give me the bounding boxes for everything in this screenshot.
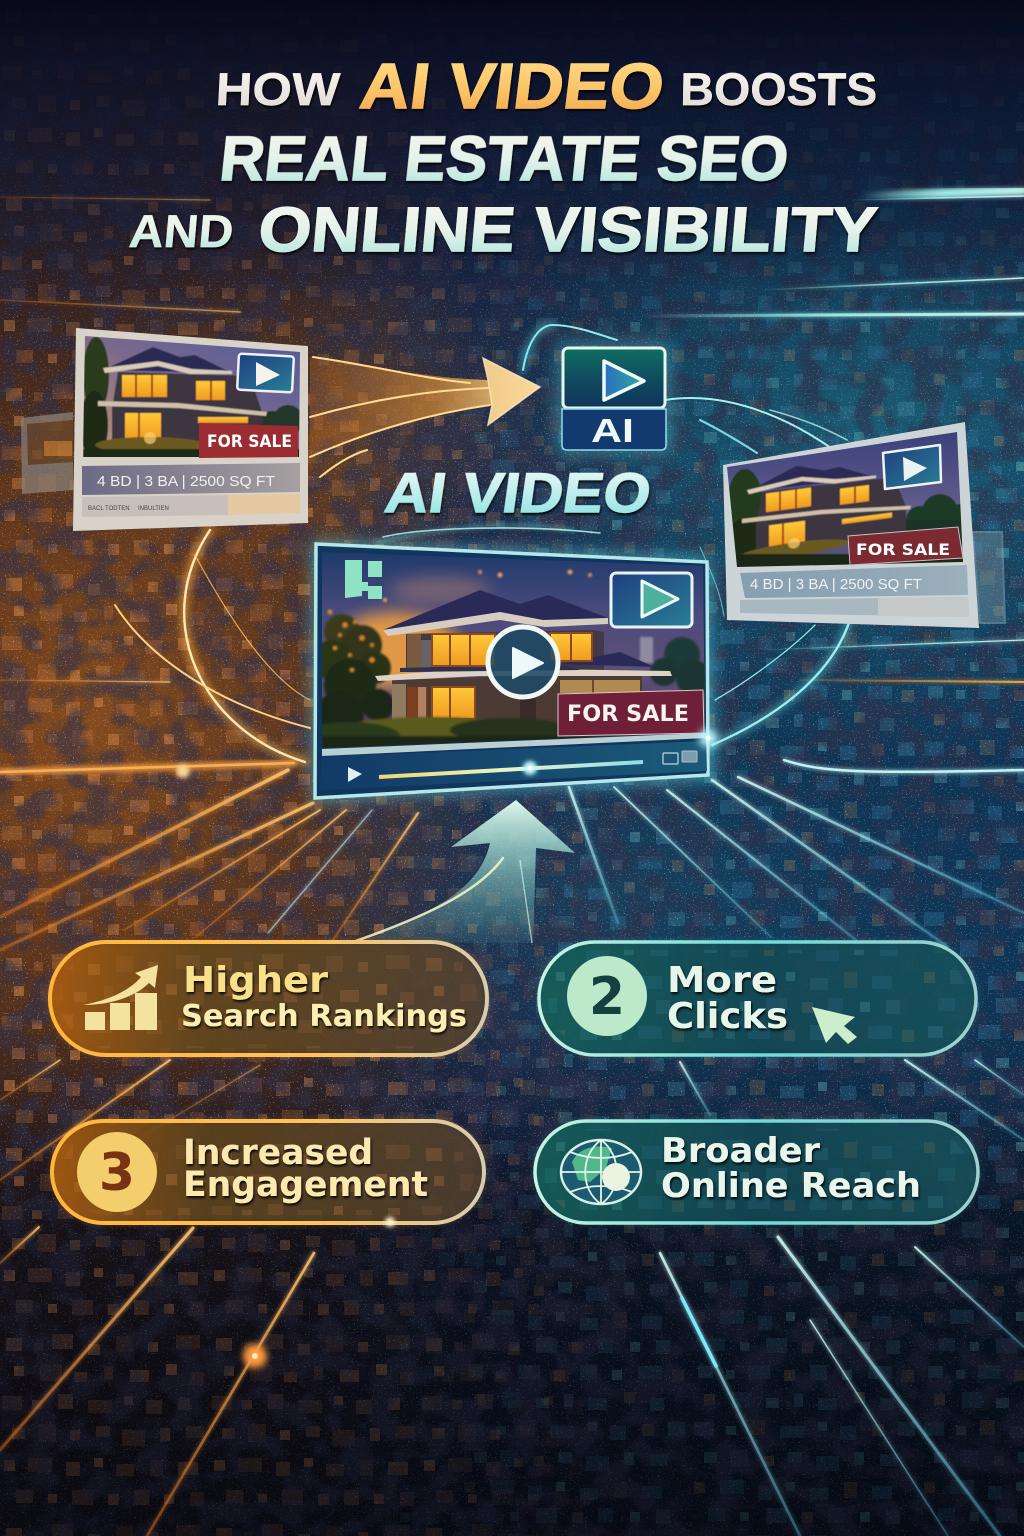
pill label (183, 1133, 428, 1205)
pill label (661, 1131, 921, 1206)
fine print row: INBULTIEN (138, 506, 169, 512)
benefit pill: broader online reach (535, 1121, 978, 1223)
trees (324, 614, 360, 650)
AI VIDEO heading: AI VIDEO (381, 461, 655, 524)
title line 1: BOOSTS (680, 63, 878, 115)
video scene: house at sunset (300, 552, 712, 752)
title line 1 (214, 50, 878, 122)
for sale sign (848, 527, 963, 565)
benefit pill: more clicks (539, 942, 976, 1055)
for sale sign: FOR SALE (567, 702, 689, 727)
control bar (320, 741, 707, 790)
walls (406, 630, 604, 672)
for sale sign (558, 690, 704, 736)
icon: rising bar chart (83, 965, 158, 1030)
icon: globe (561, 1140, 641, 1204)
centre play button (488, 627, 558, 697)
title line 3: AND (127, 205, 236, 257)
for sale sign: FOR SALE (856, 540, 950, 559)
pill label: Increased (183, 1133, 373, 1173)
main video player (300, 540, 717, 802)
title line 1: HOW (214, 63, 342, 115)
pill label (667, 960, 788, 1037)
control bar divider (322, 733, 706, 756)
property details band (740, 565, 968, 598)
shrubs (322, 716, 657, 748)
listing photo: house at dusk (727, 432, 963, 567)
small background card: right (973, 532, 1005, 623)
upward arrow into player (353, 800, 575, 943)
AI video icon (555, 340, 673, 455)
title line 1: AI VIDEO (356, 50, 668, 122)
video badge (237, 354, 294, 392)
pill label (181, 960, 467, 1034)
number badge 3: 3 (99, 1143, 135, 1203)
number badge 3 (77, 1132, 157, 1212)
pill label: Broader (661, 1131, 820, 1171)
property details band: 4 BD | 3 BA | 2500 SQ FT (97, 473, 275, 490)
pill label: Higher (183, 960, 328, 1001)
property details band (82, 463, 300, 495)
listing card: right (720, 422, 979, 628)
pill label: Online Reach (661, 1166, 921, 1206)
number badge 2: 2 (589, 967, 625, 1027)
icon: play tile (563, 348, 665, 408)
number badge 2 (567, 956, 647, 1036)
for sale sign: FOR SALE (207, 432, 292, 452)
video badge (611, 573, 692, 627)
video badge (883, 445, 941, 489)
pill label: Search Rankings (181, 999, 467, 1034)
title line 3: ONLINE VISIBILITY (256, 195, 880, 265)
pill label: Engagement (183, 1165, 428, 1205)
for sale sign (199, 423, 298, 458)
property details band: 4 BD | 3 BA | 2500 SQ FT (750, 576, 922, 593)
icon: cursor (812, 1007, 857, 1044)
fine print row (740, 597, 969, 617)
pill label: More (667, 960, 777, 1001)
glowing orbit lines (115, 325, 860, 762)
logo mark (345, 560, 382, 599)
windows (432, 634, 495, 666)
benefit pill: increased engagement (52, 1121, 484, 1227)
icon: AI tile: AI (591, 412, 634, 449)
pill label: Clicks (667, 996, 788, 1037)
benefit pill: higher search rankings (50, 942, 487, 1055)
listing photo: house at dusk (83, 336, 300, 457)
listing card: left (73, 328, 308, 531)
fine print row (82, 494, 300, 517)
title (127, 50, 880, 265)
title line 2: REAL ESTATE SEO (217, 124, 792, 194)
small background card: left (21, 412, 73, 494)
roofs (383, 590, 608, 630)
fine print row: BACL TODTEN (88, 506, 130, 512)
orange arrow to AI icon (310, 357, 540, 477)
